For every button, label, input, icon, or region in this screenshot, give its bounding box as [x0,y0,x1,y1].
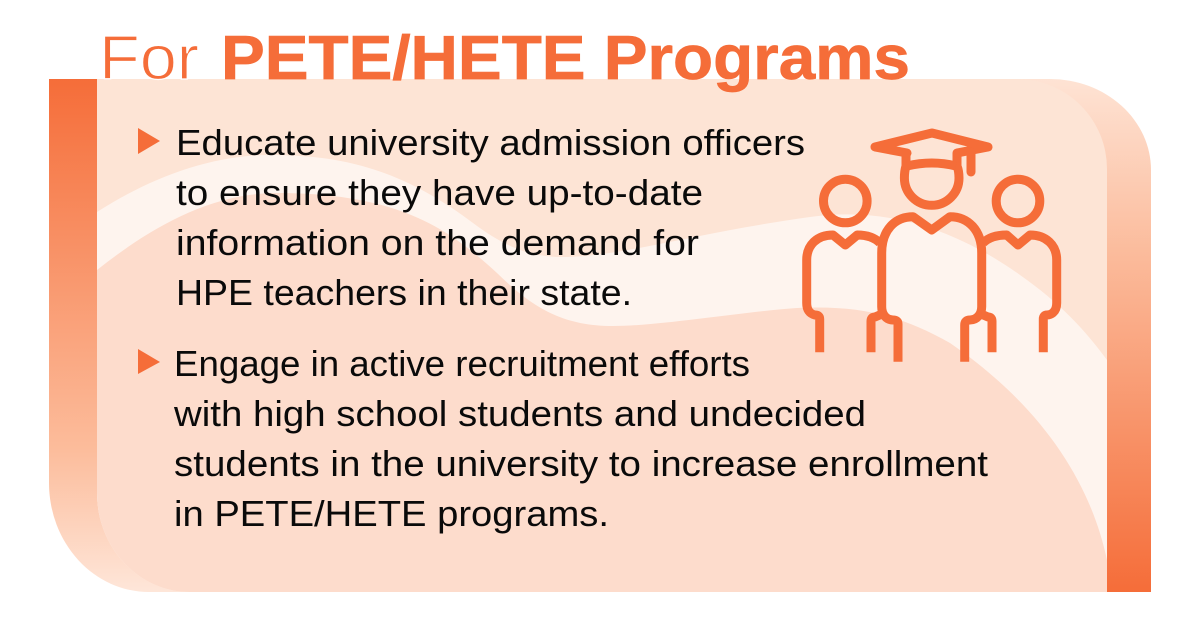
bullet text: educate admission officers: to ensure they have up-to-date [176,172,703,213]
bullet text: educate admission officers [176,122,805,313]
center figure with cap [875,133,988,362]
left figure [807,179,882,352]
bullet text: educate admission officers: HPE teachers in their state. [176,272,632,313]
bullet arrow icon [138,128,160,154]
panel: inner content background [97,79,1107,592]
bullet text: active recruitment: with high school students and undecided [173,393,866,434]
right figure [981,179,1057,352]
bullet 2 [138,343,988,534]
title: For [99,24,199,93]
bullet arrow icon [138,349,160,374]
bullet text: active recruitment [173,343,988,534]
bullet text: educate admission officers: information on the demand for [176,222,699,263]
panel: gradient backing shape [49,79,1151,592]
bullet text: active recruitment: Engage in active recruitment efforts [174,343,750,384]
bullet text: active recruitment: in PETE/HETE programs. [174,493,609,534]
bullet text: active recruitment: students in the university to increase enrollment [174,443,988,484]
title: PETE/HETE Programs [221,24,910,93]
icon: three graduates [807,133,1057,362]
bullet 1 [138,122,805,313]
bullet text: educate admission officers: Educate university admission officers [176,122,805,163]
